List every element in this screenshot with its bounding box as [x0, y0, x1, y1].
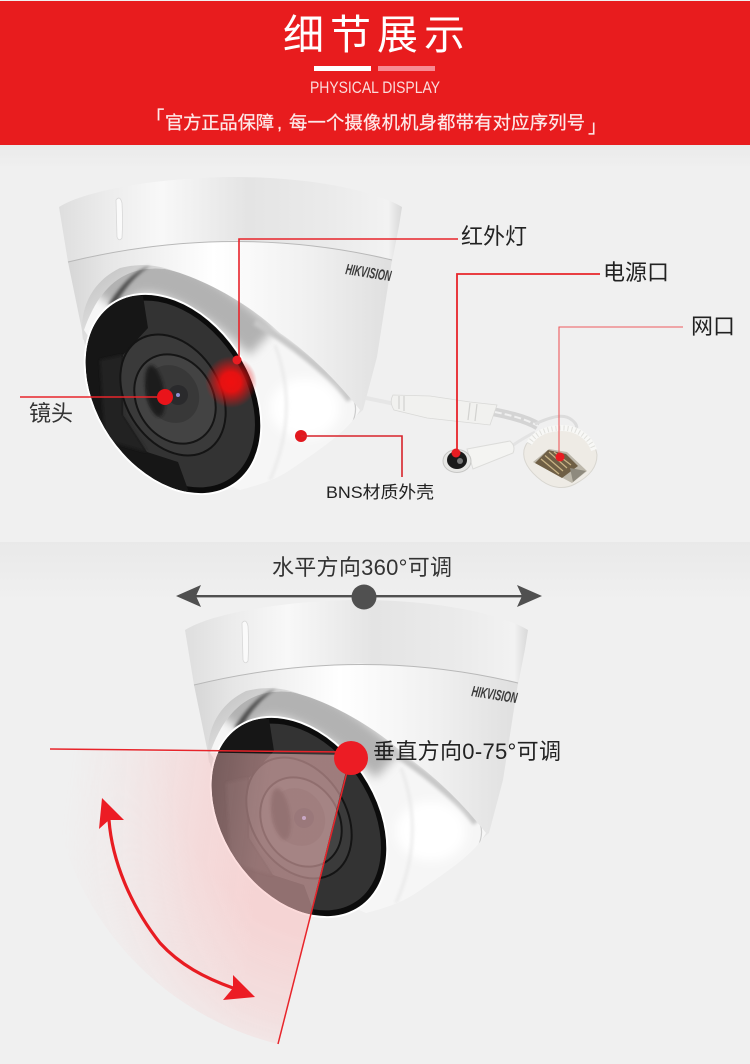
- tagline: 每一个摄像机机身都带有对应序列号: [289, 112, 585, 133]
- label: infrared light: 红外灯: [461, 224, 527, 249]
- label: power port: 电源口: [603, 260, 669, 285]
- tagline: 「: [146, 107, 164, 128]
- vertical tilt wedge: [50, 741, 368, 1044]
- tagline: [146, 107, 606, 137]
- horizontal rotation heading: 水平方向360°可调: [272, 555, 452, 580]
- camera photo: detail view: [47, 177, 402, 529]
- cable and connectors: [366, 395, 597, 488]
- callout: BNS shell: [295, 430, 434, 502]
- vertical tilt label: 垂直方向0-75°可调: [373, 739, 561, 764]
- tagline: 」: [588, 116, 606, 137]
- tagline: ,: [277, 112, 282, 133]
- label: lens: 镜头: [29, 401, 73, 426]
- top section shade: [0, 145, 750, 169]
- title: 细节展示: [283, 12, 465, 58]
- network port: [524, 427, 597, 488]
- curved double arrow: [99, 798, 255, 1000]
- label: BNS shell: BNS材质外壳: [326, 483, 434, 502]
- callout: power port: [452, 260, 669, 458]
- horizontal rotation arrow: [176, 584, 542, 610]
- english subtitle: PHYSICAL DISPLAY: [310, 78, 440, 97]
- lower section shaded band: [0, 542, 750, 602]
- camera logo, rotation view: HIKVISION: [470, 683, 519, 707]
- tagline: 官方正品保障: [165, 112, 274, 133]
- callout: infrared light: [205, 224, 527, 408]
- callout: lens: [20, 389, 173, 426]
- label: network port: 网口: [691, 314, 735, 339]
- callout: network port: [556, 314, 735, 462]
- header banner: [0, 1, 750, 145]
- camera photo: rotation view: [173, 600, 528, 952]
- camera logo: HIKVISION: [344, 261, 393, 285]
- title underline bars: [314, 66, 435, 71]
- power plug: [443, 441, 514, 472]
